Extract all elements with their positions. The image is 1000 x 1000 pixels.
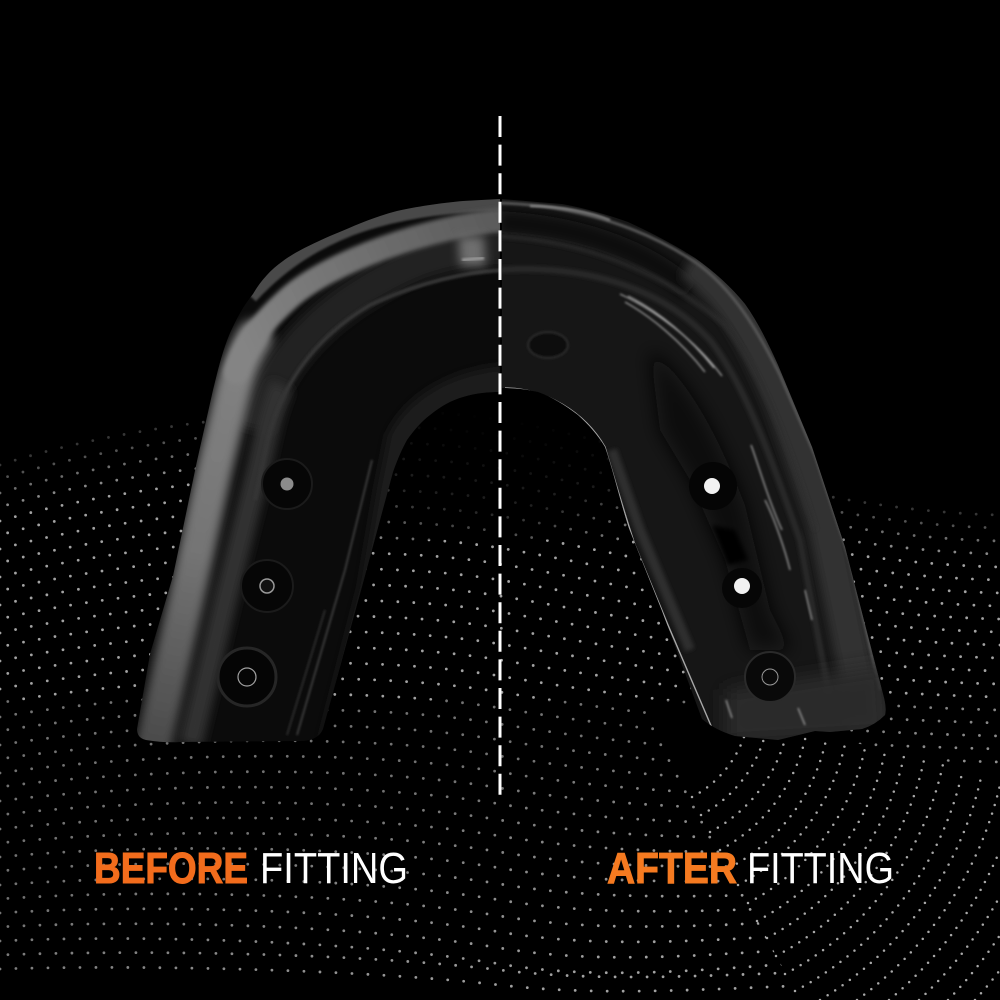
arch edge highlight — [505, 388, 712, 728]
front shine — [530, 222, 552, 228]
side light band — [150, 338, 254, 760]
label: after fitting: FITTING — [747, 844, 894, 893]
bite mark — [528, 332, 568, 358]
inner dark palate — [650, 350, 790, 650]
upper shaded channel — [255, 247, 505, 430]
dotted wave background — [0, 220, 1000, 1000]
vent hole 2 — [241, 560, 293, 612]
label: after fitting — [607, 844, 894, 893]
dashed divider — [498, 116, 502, 798]
ridge lines — [297, 460, 372, 735]
inner ridge — [500, 269, 830, 700]
label: before fitting: BEFORE — [94, 844, 248, 893]
dark upper channel — [500, 222, 690, 290]
arch inner band — [612, 450, 690, 650]
second ridge — [502, 233, 733, 339]
label: before fitting — [94, 844, 408, 893]
label: before fitting: FITTING — [260, 844, 408, 893]
mouthguard: after fitting (right half) — [500, 190, 900, 750]
outer rim line — [500, 203, 880, 690]
vent hole 3 — [218, 648, 276, 706]
inner ridge line — [285, 268, 498, 394]
end lobe shading — [725, 665, 890, 745]
vent hole 3 — [745, 652, 795, 702]
second ridge line — [287, 610, 325, 735]
outer band — [690, 262, 868, 725]
front shine streak — [462, 258, 484, 260]
vent hole 2 — [722, 568, 762, 608]
vent hole 1 — [689, 462, 737, 510]
mouthguard: before fitting (left half) — [130, 190, 505, 760]
arch ridge band — [336, 367, 500, 680]
soft side band — [190, 385, 282, 745]
label: after fitting: AFTER — [607, 844, 737, 893]
top rim highlight — [530, 206, 610, 220]
scratches — [620, 294, 812, 725]
front shine — [458, 236, 486, 266]
vent hole 1 — [262, 459, 312, 509]
top light band — [236, 220, 505, 372]
molded texture between vents — [713, 526, 746, 564]
top rim — [250, 203, 505, 296]
